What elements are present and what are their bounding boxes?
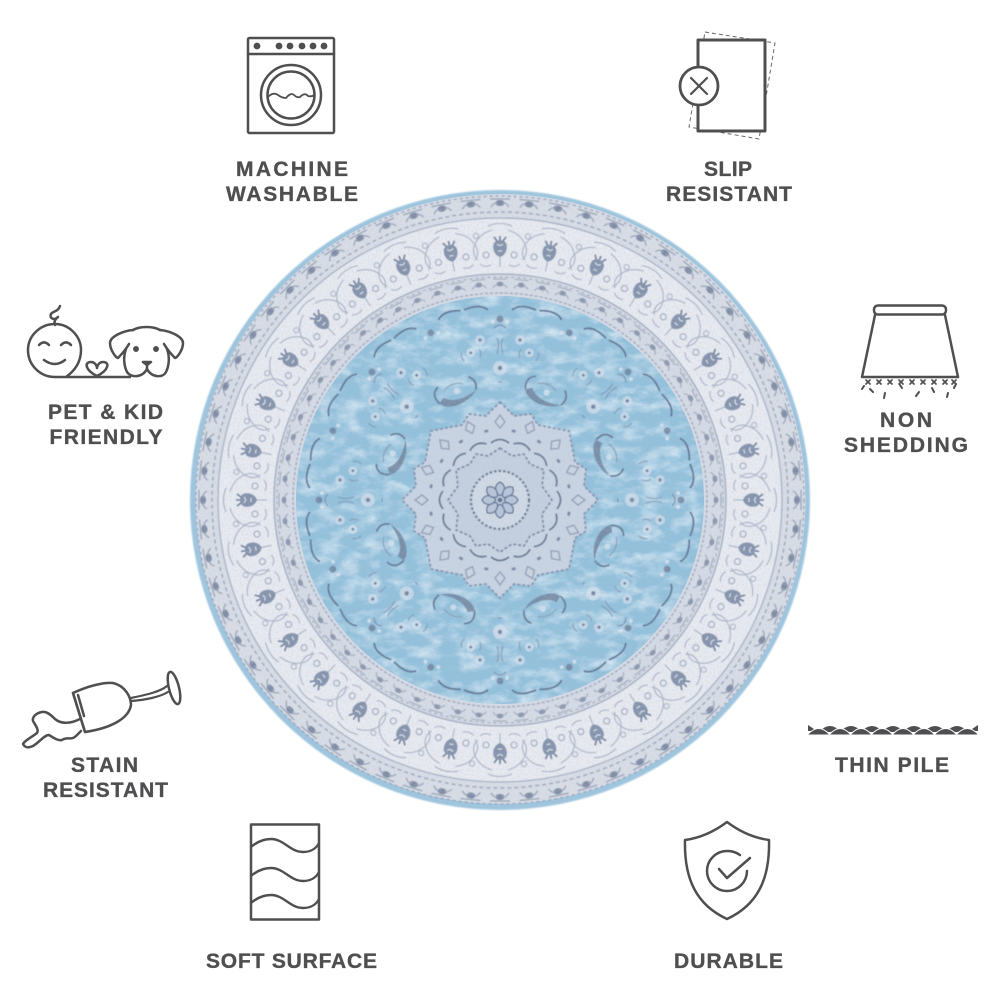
icon: wavy layers [251, 824, 319, 920]
rug border ground [196, 194, 806, 804]
rug ivory band [218, 218, 782, 782]
panel: round rug [189, 189, 811, 811]
heading: slip resistant: RESISTANT [666, 183, 792, 206]
heading: non shedding: SHEDDING [844, 434, 968, 457]
heading: pet and kid friendly: PET & KID [48, 401, 163, 424]
heading: durable: DURABLE [674, 950, 783, 973]
heading: pet and kid friendly: FRIENDLY [50, 426, 162, 449]
heading: machine washable: WASHABLE [226, 183, 358, 206]
rug blue edge [190, 190, 810, 810]
heading: soft surface: SOFT SURFACE [206, 950, 377, 973]
feature: stain resistant [23, 671, 183, 802]
icon: shield with check [685, 822, 769, 919]
feature: thin pile [807, 725, 979, 777]
heading: thin pile: THIN PILE [835, 754, 949, 777]
feature: machine washable [226, 38, 358, 206]
rug field mottling [296, 296, 704, 704]
heading: machine washable: MACHINE [236, 158, 348, 181]
icon: spilled wine glass [23, 671, 183, 747]
heading: non shedding: NON [880, 409, 932, 432]
icon: pile scallops [807, 725, 979, 735]
heading: slip resistant: SLIP [704, 158, 752, 181]
icon: rug with fringe [862, 306, 958, 398]
feature: pet and kid friendly [28, 306, 183, 449]
feature: soft surface [206, 824, 377, 973]
rug field backing [296, 296, 704, 704]
feature: slip resistant [666, 32, 792, 206]
rug woven grain [190, 190, 810, 810]
icon: baby and dog [28, 306, 183, 377]
central medallion [402, 402, 598, 598]
heading: stain resistant: STAIN [71, 754, 138, 777]
feature: durable [674, 822, 783, 973]
icon: washing machine [248, 38, 334, 133]
rug inner guard [274, 274, 726, 726]
rug ornaments [142, 142, 858, 858]
icon: slip mat [680, 32, 775, 139]
feature: non shedding [844, 306, 968, 457]
heading: stain resistant: RESISTANT [43, 779, 168, 802]
